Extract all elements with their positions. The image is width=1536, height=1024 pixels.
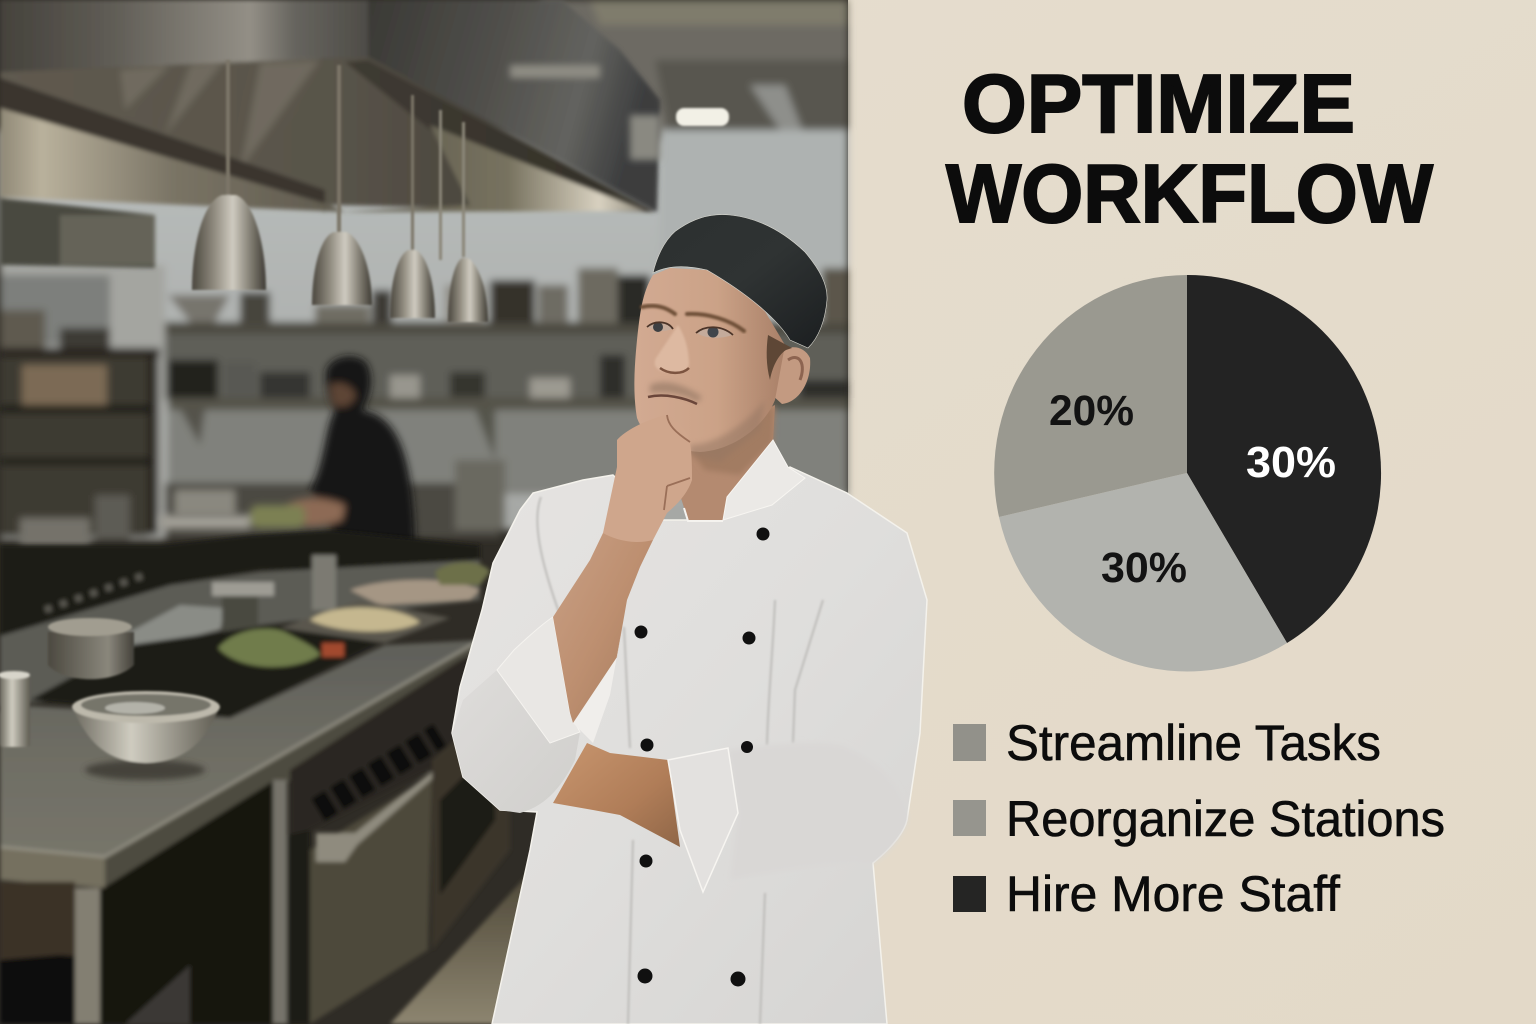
right cuff — [668, 748, 738, 892]
slice: streamline tasks 20% — [994, 275, 1187, 517]
ear — [772, 347, 810, 404]
pie chart — [994, 275, 1381, 671]
label: 30% dark slice: 30% — [1246, 438, 1336, 487]
slice: reorganize stations 30% — [999, 473, 1287, 671]
legend item: hire more staff: Hire More Staff — [1006, 866, 1340, 922]
lower kitchen — [0, 530, 532, 1024]
grey prep surface — [0, 560, 480, 706]
oven range — [290, 610, 520, 840]
left rack and appliance — [0, 265, 165, 540]
background cook — [160, 356, 415, 555]
raised forearm — [553, 533, 653, 723]
collar — [723, 440, 805, 520]
label: 30% light slice: 30% — [1101, 544, 1187, 592]
stubble — [690, 400, 765, 462]
title — [946, 57, 1434, 240]
folded forearm — [553, 743, 680, 847]
fist — [603, 415, 692, 542]
items behind the cook — [165, 483, 500, 538]
title: WORKFLOW — [946, 147, 1434, 240]
floor — [390, 870, 532, 1024]
exhaust hood — [0, 0, 660, 268]
title: OPTIMIZE — [962, 57, 1355, 150]
white cuff flap — [573, 622, 623, 743]
slice: hire more staff 30% — [1187, 275, 1381, 643]
metal bowl, pot and cup — [0, 618, 220, 780]
jacket seams — [537, 497, 823, 1024]
ceiling light — [676, 108, 729, 126]
legend — [953, 715, 1445, 922]
label: 20% slice: 20% — [1049, 387, 1134, 435]
upper shelf — [165, 334, 848, 400]
under counter — [0, 882, 75, 1024]
chef hat — [653, 215, 827, 348]
grill top — [30, 625, 385, 718]
face — [634, 268, 785, 452]
legend item: streamline tasks: Streamline Tasks — [1006, 715, 1381, 771]
plates — [350, 580, 480, 605]
ceiling and wall — [0, 130, 848, 530]
dark range at back — [0, 530, 480, 636]
left lower sleeve — [452, 670, 580, 813]
right sleeve fold — [728, 743, 907, 880]
lower shelf — [168, 409, 848, 494]
pendant lamps — [192, 60, 488, 322]
nose — [655, 325, 689, 373]
jacket torso and shoulders — [452, 467, 927, 1024]
neck — [642, 405, 775, 520]
jacket buttons — [634, 528, 770, 986]
kitchen background photo — [0, 0, 848, 1024]
mouth and moustache shadow — [650, 382, 702, 402]
eyes and brows — [642, 306, 744, 338]
hair — [767, 335, 792, 380]
legend item: reorganize stations: Reorganize Stations — [1006, 791, 1445, 847]
main counter — [0, 640, 480, 858]
chef — [452, 215, 927, 1024]
